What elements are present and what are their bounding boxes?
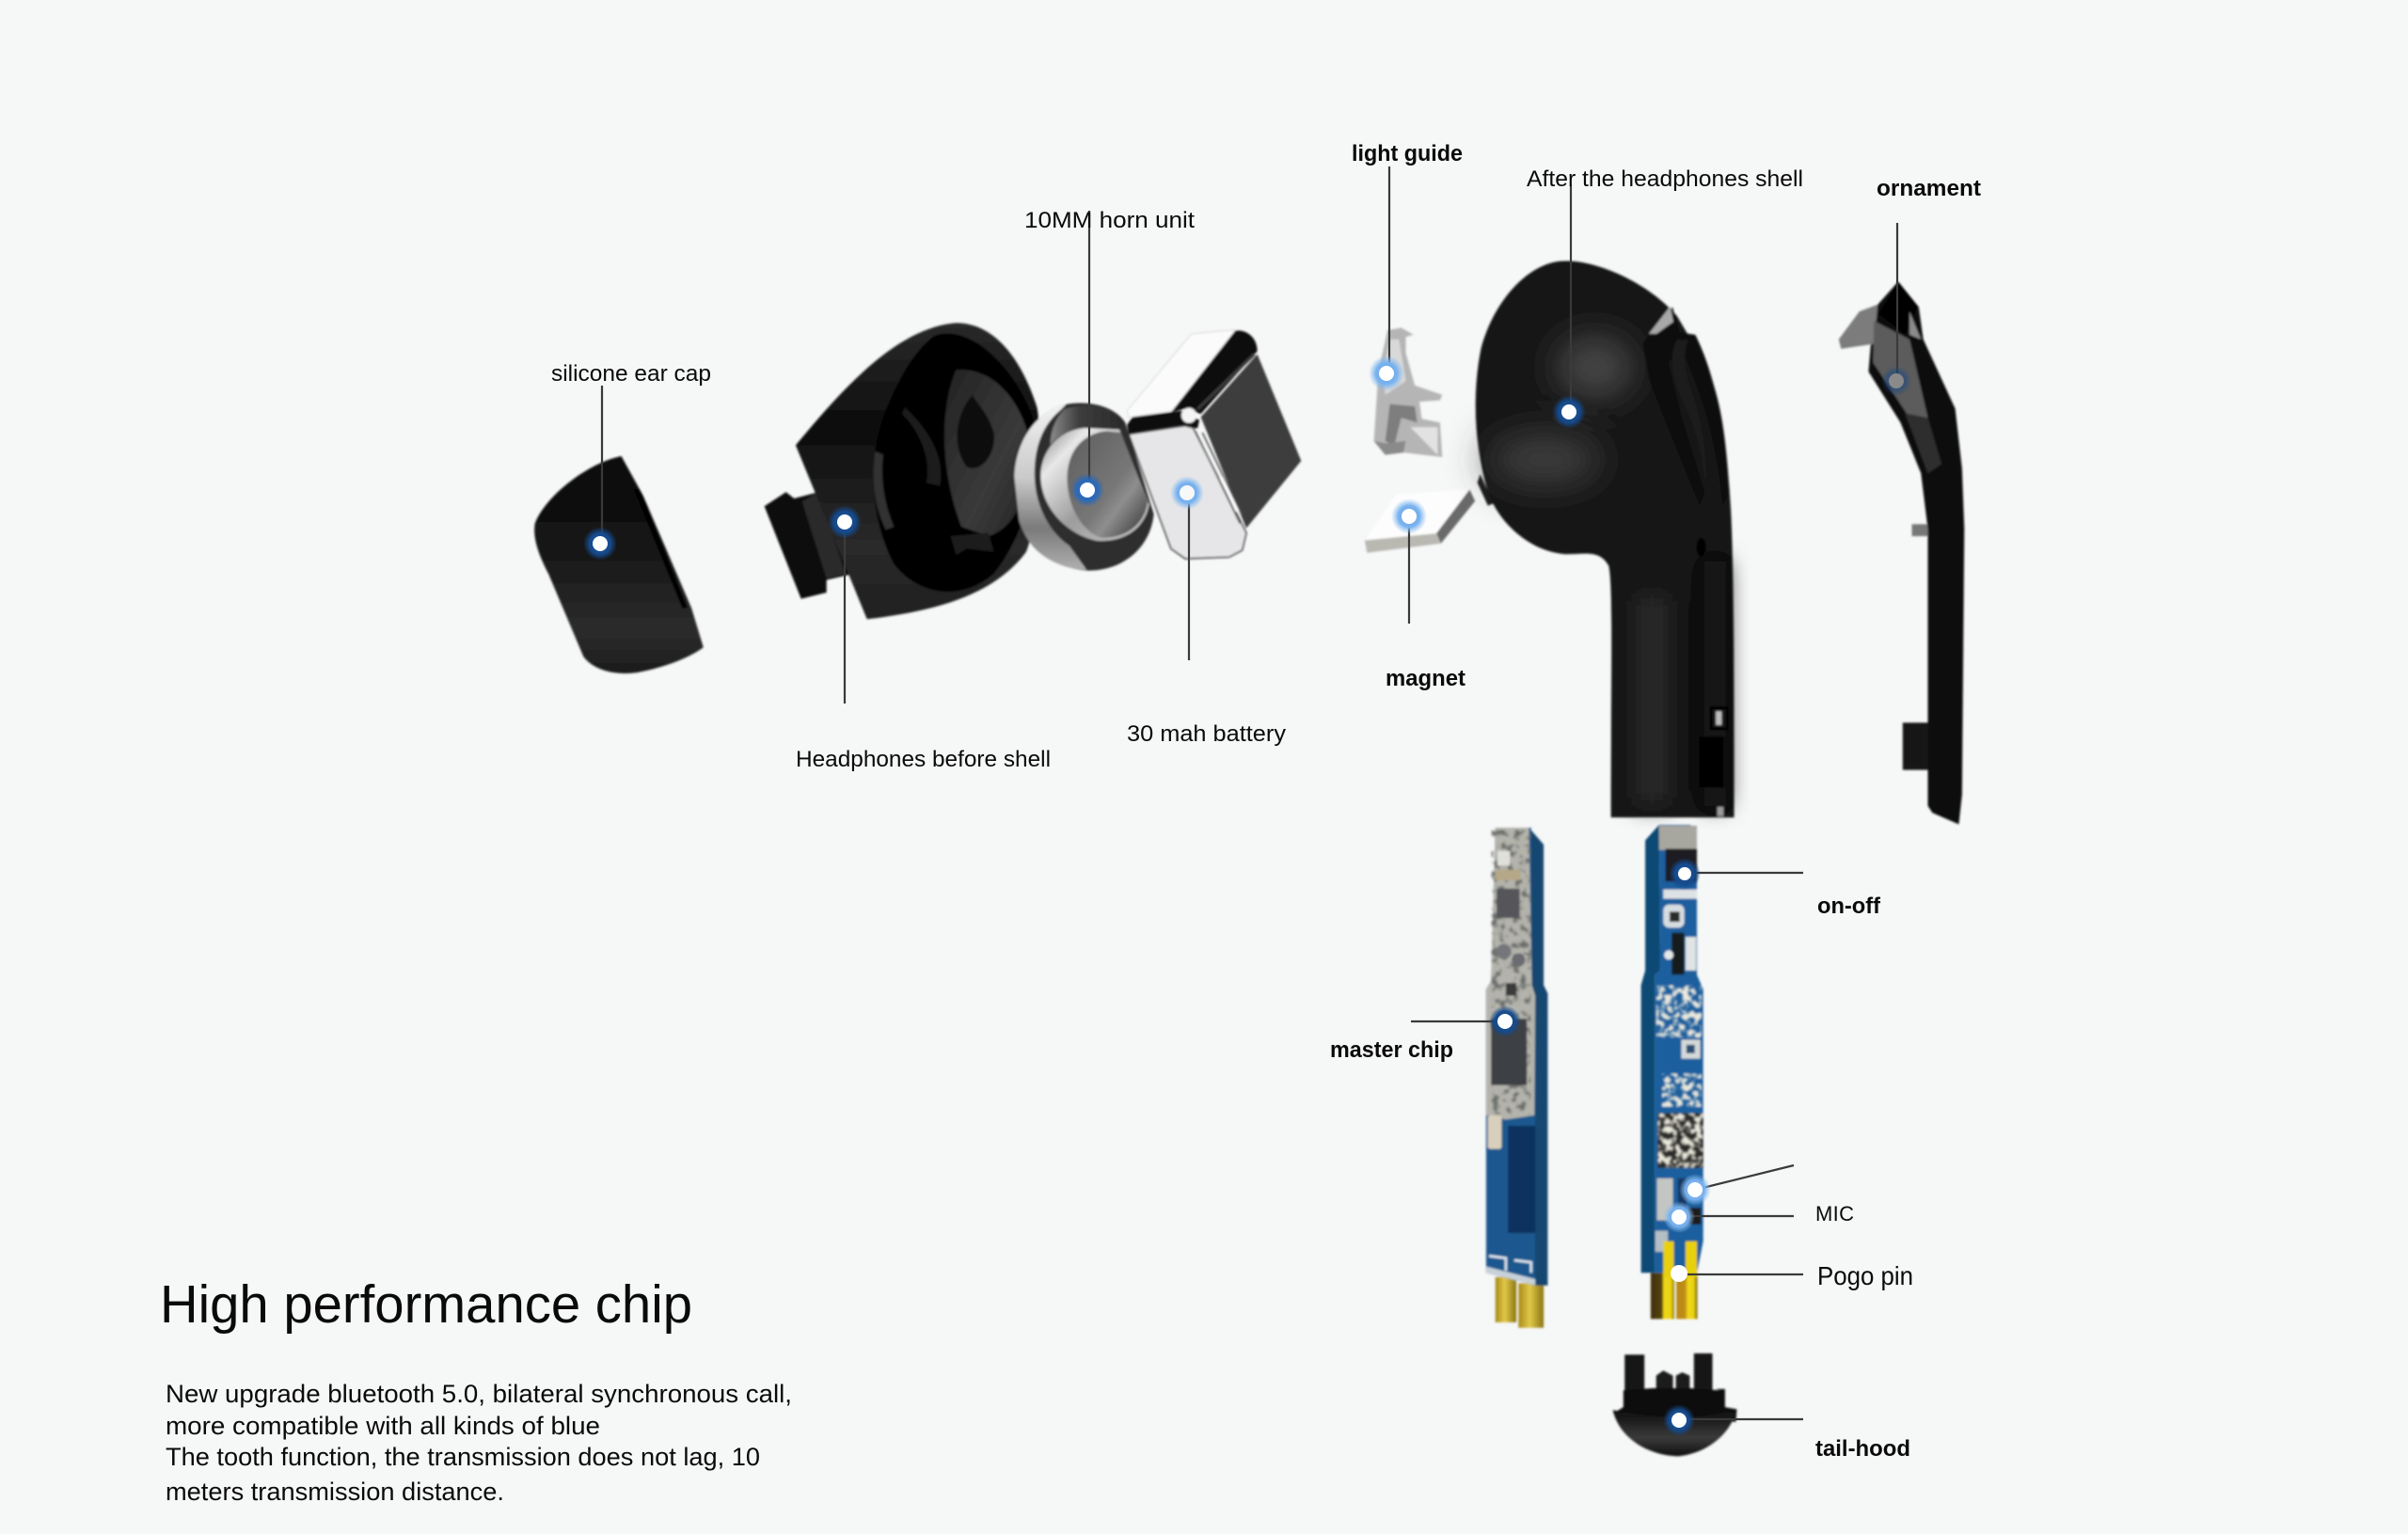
text block: description: New upgrade bluetooth 5.0, bilateral synchronous call, [166, 1380, 792, 1408]
dot: MIC lower [1663, 1201, 1695, 1233]
dot: magnet [1391, 498, 1427, 534]
text block: description: more compatible with all kinds of blue [166, 1412, 600, 1440]
label: Pogo pin: Pogo pin [1817, 1261, 1913, 1290]
label: 30 mah battery: 30 mah battery [1127, 721, 1286, 747]
dot: master chip [1489, 1005, 1521, 1037]
dot: after shell [1552, 395, 1586, 429]
dot: pogo pin [1671, 1265, 1687, 1282]
part: left circuit board with master chip [1486, 828, 1548, 1328]
text block: description: meters transmission distance. [166, 1478, 504, 1506]
dot: tail-hood [1663, 1404, 1695, 1436]
label: headphones before shell: Headphones before shell [796, 747, 1051, 772]
dot: light guide [1369, 356, 1404, 391]
dot: MIC upper [1679, 1174, 1711, 1206]
text block: description: The tooth function, the transmission does not lag, 10 [166, 1443, 760, 1471]
part: light guide [1374, 328, 1442, 457]
label: 10MM horn unit: 10MM horn unit [1024, 208, 1195, 233]
label: ornament: ornament [1877, 176, 1981, 201]
dot: on-off [1669, 858, 1701, 890]
label: master chip: master chip [1330, 1037, 1453, 1063]
illustration: exploded earbud parts [534, 261, 1964, 1456]
heading: High performance chip: High performance chip [160, 1274, 692, 1335]
part: 10MM horn unit [1014, 403, 1154, 571]
part: right circuit board [1641, 825, 1703, 1319]
label: on-off: on-off [1817, 894, 1881, 919]
marker dots [583, 356, 1911, 1436]
label: light guide: light guide [1352, 141, 1463, 166]
text block: description [166, 1380, 792, 1506]
dot: horn unit [1070, 473, 1104, 507]
part: tail-hood [1613, 1353, 1736, 1456]
dot: front shell [828, 505, 862, 539]
label: tail-hood: tail-hood [1815, 1436, 1910, 1462]
label: magnet: magnet [1386, 666, 1465, 691]
dot: battery [1170, 476, 1204, 510]
part: headphones front shell [765, 323, 1040, 619]
part: ornament [1839, 281, 1964, 824]
label: after the headphones shell: After the headphones shell [1527, 166, 1803, 192]
leader lines [602, 166, 1897, 1419]
part: magnet [1365, 489, 1475, 553]
part: 30 mah battery [1127, 330, 1301, 559]
label: MIC: MIC [1815, 1202, 1854, 1226]
dot: ornament [1881, 366, 1911, 396]
label: silicone ear cap: silicone ear cap [551, 361, 711, 387]
dot: silicone ear cap [583, 527, 617, 561]
part: after the headphones shell [1476, 261, 1735, 817]
part: silicone ear cap [534, 456, 704, 673]
